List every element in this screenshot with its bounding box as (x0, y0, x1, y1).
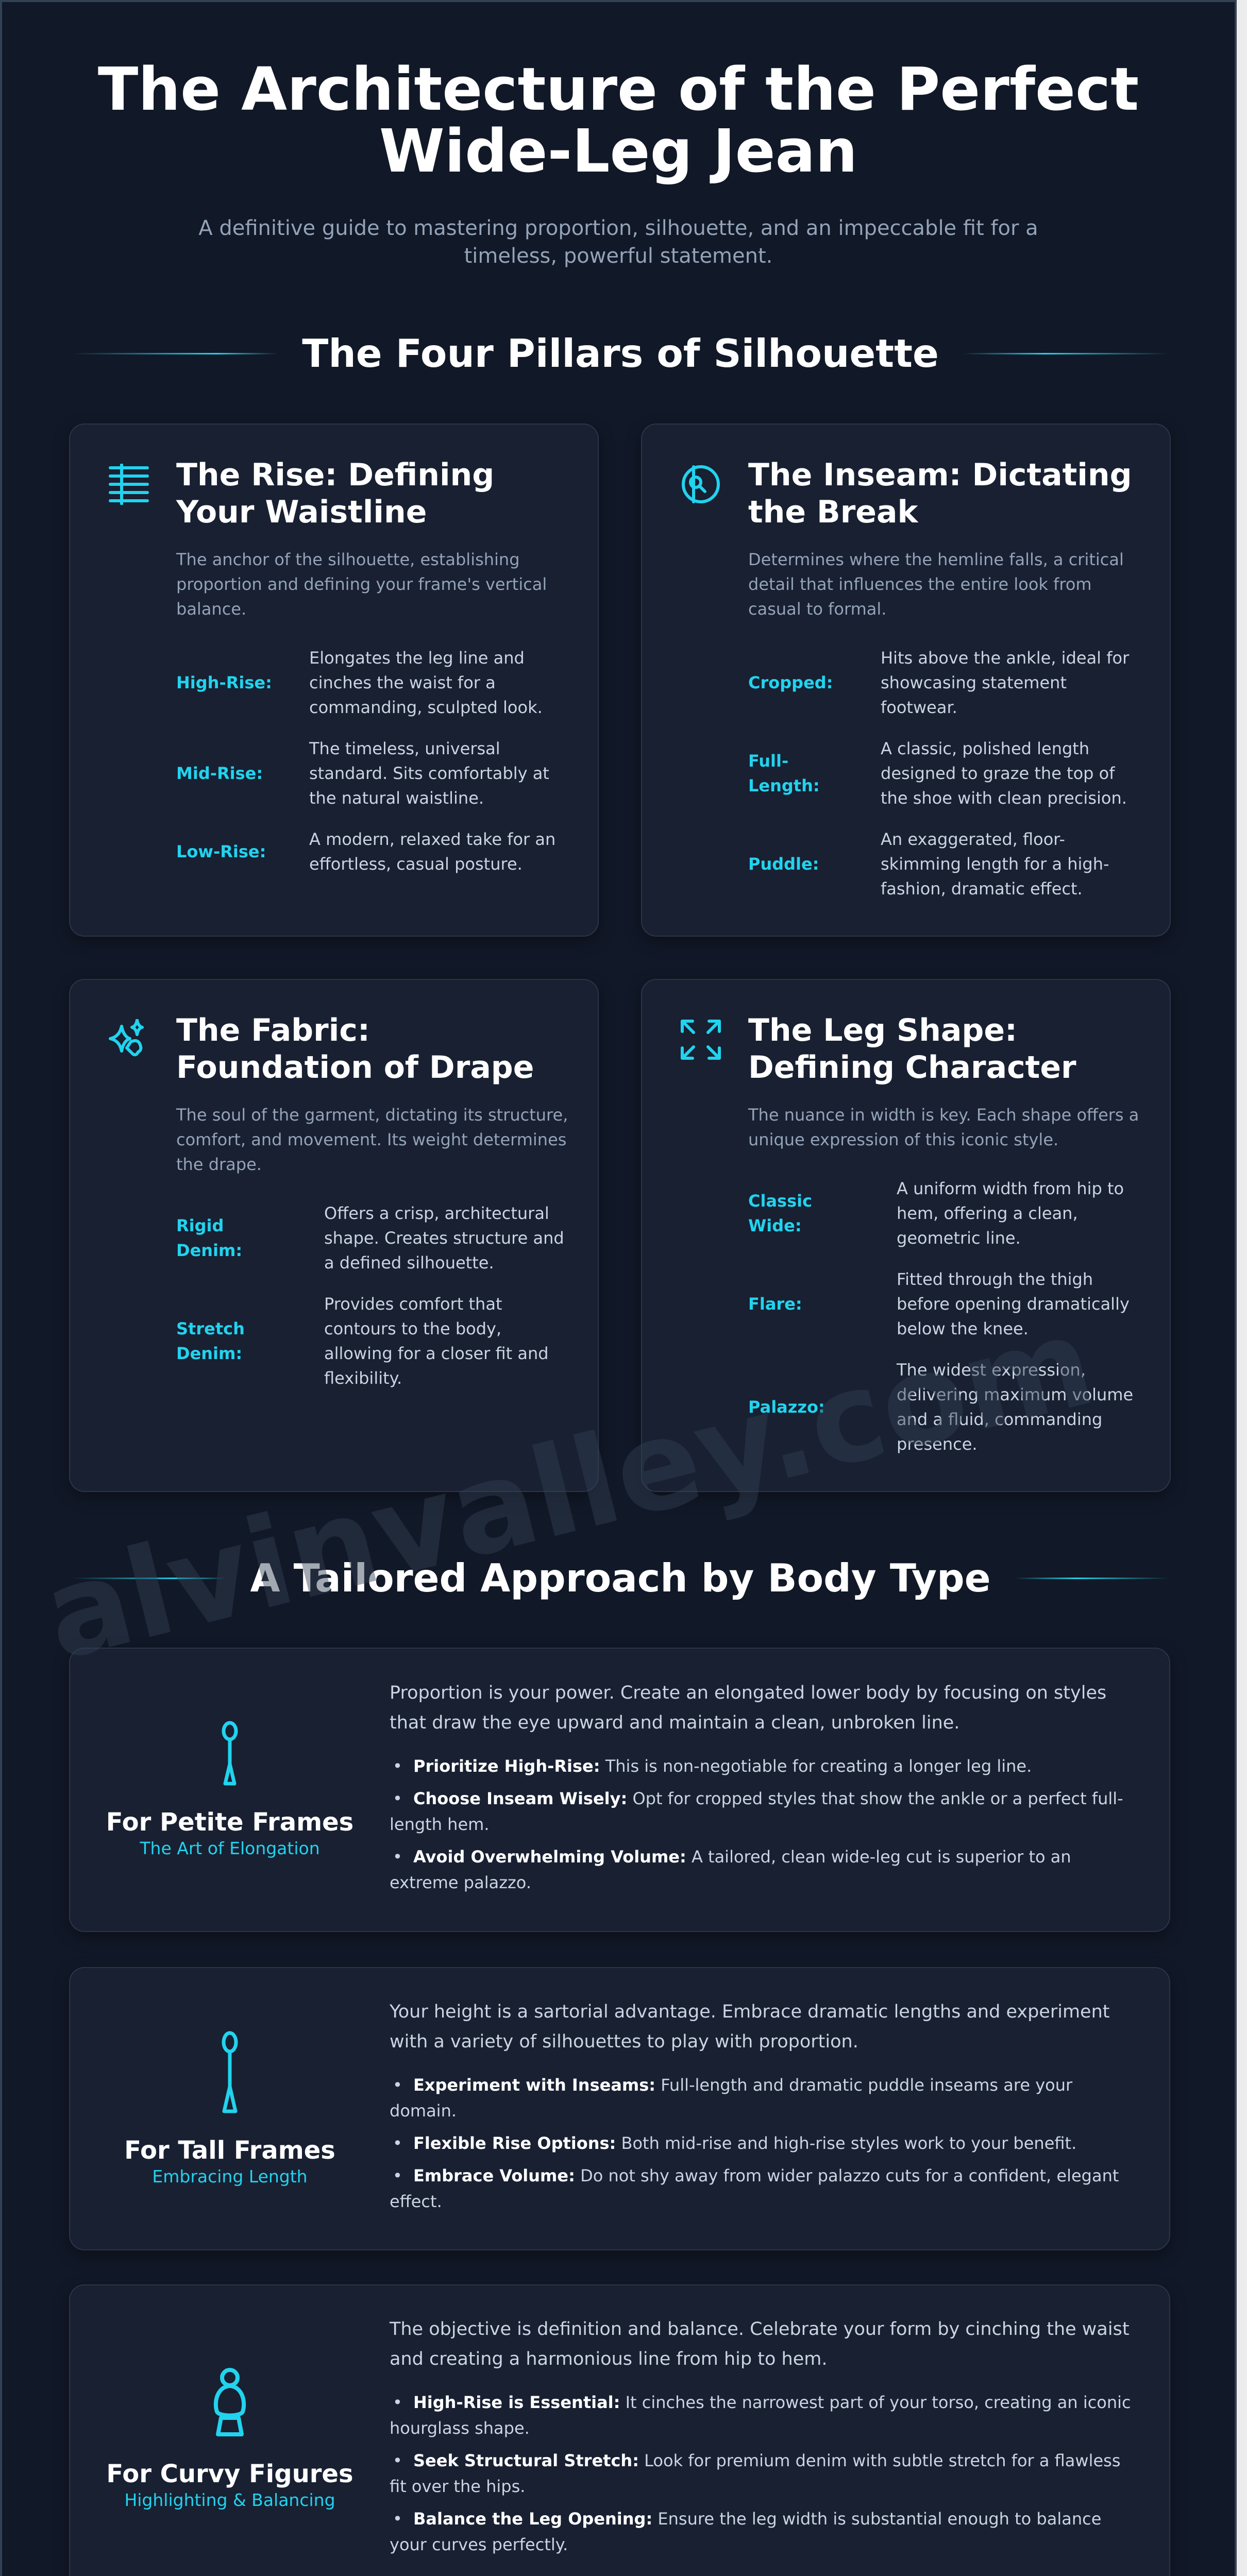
panel: tall: Embracing Length (152, 2166, 308, 2187)
panel: the rise: A modern, relaxed take for an effortless, casual posture. (309, 829, 555, 874)
panel: the rise: Elongates the leg line and cinches the waist for a commanding, sculpted look. (309, 648, 543, 717)
panel: the fabric: Denim: (176, 1344, 242, 1363)
panel: the rise: Your Waistline (176, 494, 427, 530)
panel: petite: Choose Inseam Wisely: Opt for cropped styles that show the ankle or a perfect full-length hem. (390, 1789, 1123, 1834)
panel: the fabric: Denim: (176, 1241, 242, 1260)
panel: the fabric (69, 979, 599, 1492)
icon: inseam (682, 465, 720, 503)
panel: the fabric: The Fabric: (176, 1012, 370, 1048)
panel: the rise: Mid-Rise: (176, 764, 263, 783)
panel: curvy: Balance the Leg Opening: Ensure the leg width is substantial enough to balance your curves perfectly. (390, 2509, 1101, 2554)
panel: the rise: The timeless, universal standard. Sits comfortably at the natural waistline. (309, 739, 549, 808)
section heading: body type (76, 1555, 1166, 1601)
icon: curvy figure (213, 2368, 246, 2436)
panel: the leg shape: Flare: (748, 1294, 802, 1314)
panel: petite: Avoid Overwhelming Volume: A tailored, clean wide-leg cut is superior to an extreme palazzo. (390, 1846, 1071, 1892)
panel: the inseam: A classic, polished length designed to graze the top of the shoe with clean precision. (881, 739, 1127, 808)
panel: the inseam: Determines where the hemline falls, a critical detail that influences the entire look from casual to formal. (748, 550, 1124, 619)
panel: the inseam: Hits above the ankle, ideal for showcasing statement footwear. (881, 648, 1129, 717)
icon: petite figure (222, 1721, 238, 1786)
panel: the inseam: An exaggerated, floor-skimming length for a high-fashion, dramatic effect. (881, 829, 1109, 899)
panel: petite: For Petite Frames (106, 1808, 353, 1837)
panel: tall: For Tall Frames (124, 2136, 335, 2165)
section heading: four pillars: The Four Pillars of Silhouette (302, 331, 939, 376)
panel: tall: Flexible Rise Options: Both mid-rise and high-rise styles work to your benefit. (413, 2133, 1076, 2153)
panel: the fabric: Rigid (176, 1216, 224, 1235)
panel: curvy (69, 2284, 1170, 2576)
panel: the leg shape: Palazzo: (748, 1397, 825, 1417)
panel: tall: Embrace Volume: Do not shy away from wider palazzo cuts for a confident, elegant effect. (390, 2166, 1119, 2211)
panel: the rise (69, 423, 599, 937)
panel: the inseam: Puddle: (748, 854, 819, 874)
panel: the rise: The Rise: Defining (176, 457, 494, 493)
panel: the rise: Low-Rise: (176, 842, 266, 861)
panel: the inseam: Length: (748, 776, 820, 795)
title: Wide-Leg Jean (379, 117, 857, 186)
panel: tall: Your height is a sartorial advantage. Embrace dramatic lengths and experiment with a variety of silhouettes to play with proportion. (390, 2001, 1110, 2052)
icon: sparkles (109, 1019, 144, 1056)
panel: petite: Prioritize High-Rise: This is non-negotiable for creating a longer leg line. (413, 1756, 1032, 1775)
panel: the leg shape: The nuance in width is key. Each shape offers a unique expression of this iconic style. (748, 1105, 1139, 1149)
panel: the leg shape: Wide: (748, 1216, 802, 1235)
panel: the leg shape: The Leg Shape: (748, 1012, 1017, 1048)
panel: the leg shape: The widest expression, delivering maximum volume and a fluid, commanding presence. (897, 1360, 1133, 1454)
icon: tall figure (222, 2031, 238, 2113)
title (98, 55, 1139, 186)
panel: curvy: Seek Structural Stretch: Look for premium denim with subtle stretch for a flawless fit over the hips. (390, 2450, 1120, 2496)
panel: petite (69, 1648, 1170, 1932)
section heading: four pillars (77, 331, 1164, 376)
panel: the leg shape: Defining Character (748, 1049, 1076, 1086)
panel: the inseam: the Break (748, 494, 918, 530)
panel: the inseam (641, 423, 1171, 937)
panel: the rise: The anchor of the silhouette, establishing proportion and defining your frame's vertical balance. (176, 550, 547, 619)
icon: expand arrows (681, 1020, 721, 1060)
watermark: alvinvalley.com (31, 1289, 1107, 1688)
panel: the leg shape: Fitted through the thigh before opening dramatically below the knee. (897, 1269, 1130, 1338)
panel: curvy: The objective is definition and balance. Celebrate your form by cinching the waist and creating a harmonious line from hip to hem. (390, 2318, 1130, 2369)
panel: curvy: High-Rise is Essential: It cinches the narrowest part of your torso, creating an iconic hourglass shape. (390, 2393, 1131, 2438)
panel: the leg shape: A uniform width from hip to hem, offering a clean, geometric line. (897, 1179, 1124, 1248)
subtitle: A definitive guide to mastering proportion, silhouette, and an impeccable fit for a timeless, powerful statement. (198, 216, 1038, 268)
panel: petite: Proportion is your power. Create an elongated lower body by focusing on styles that draw the eye upward and maintain a clean, unbroken line. (390, 1683, 1106, 1733)
icon: rise lines (109, 464, 149, 505)
panel: the inseam: The Inseam: Dictating (748, 457, 1132, 493)
panel: the inseam: Cropped: (748, 673, 833, 692)
panel: the fabric: Stretch (176, 1319, 245, 1338)
panel: the fabric: Provides comfort that contours to the body, allowing for a closer fit and flexibility. (324, 1294, 549, 1388)
panel: the inseam: Full- (748, 751, 788, 771)
panel: the leg shape (641, 979, 1171, 1492)
panel: the rise: High-Rise: (176, 673, 272, 692)
panel: curvy: For Curvy Figures (106, 2460, 353, 2488)
section heading: body type: A Tailored Approach by Body Type (250, 1555, 991, 1601)
panel: the leg shape: Classic (748, 1191, 812, 1211)
panel: tall (69, 1967, 1170, 2250)
panel: the fabric: Offers a crisp, architectural shape. Creates structure and a defined silhouette. (324, 1204, 564, 1273)
panel: the fabric: Foundation of Drape (176, 1049, 534, 1086)
panel: the fabric: The soul of the garment, dictating its structure, comfort, and movement. Its weight determines the drape. (176, 1105, 568, 1174)
panel: tall: Experiment with Inseams: Full-length and dramatic puddle inseams are your domain. (390, 2075, 1072, 2121)
title: The Architecture of the Perfect (98, 55, 1139, 124)
panel: curvy: Highlighting & Balancing (124, 2490, 335, 2510)
panel: petite: The Art of Elongation (140, 1838, 320, 1858)
